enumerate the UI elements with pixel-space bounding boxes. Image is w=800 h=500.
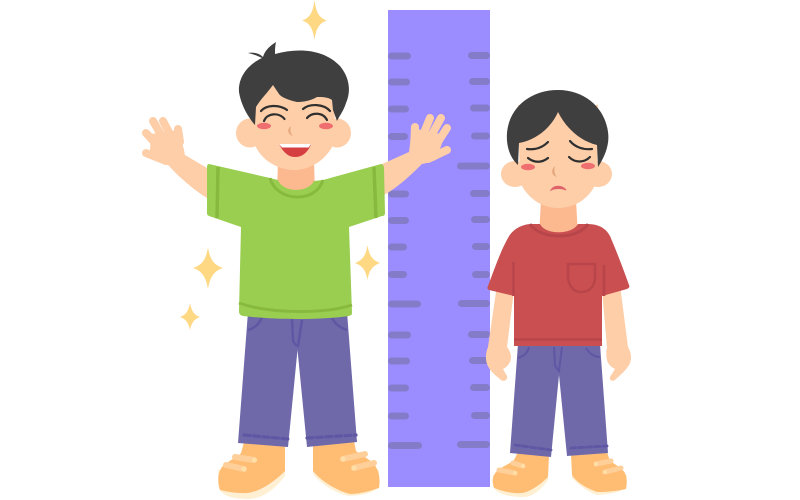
cheeks (257, 123, 271, 129)
ears (236, 118, 264, 148)
open mouth (279, 144, 311, 157)
green t-shirt (207, 164, 385, 319)
tall happy boy (146, 42, 447, 499)
hair (239, 42, 349, 125)
nose (552, 166, 557, 177)
nose (288, 126, 293, 136)
head (236, 42, 351, 170)
right arm and hand (380, 118, 447, 197)
trousers (238, 312, 357, 447)
sad mouth (551, 186, 566, 190)
hair (507, 90, 608, 167)
ears (501, 161, 529, 187)
shoes (218, 441, 380, 499)
head (501, 90, 612, 208)
neck (277, 160, 315, 194)
pocket (568, 264, 595, 292)
cheeks (521, 164, 535, 170)
shirt details (217, 167, 376, 312)
eyes and brows (527, 141, 592, 162)
left arm and hand (486, 285, 514, 381)
left arm and hand (146, 121, 207, 198)
icon: sparkle large left (193, 247, 223, 289)
face (254, 80, 335, 170)
red t-shirt (487, 224, 629, 346)
face (518, 105, 598, 208)
trousers (510, 344, 608, 457)
shoes (493, 452, 627, 497)
neck (539, 200, 578, 236)
ruler (388, 10, 490, 487)
shirt details (514, 224, 604, 340)
right arm and hand (602, 285, 631, 381)
icon: sparkle right (355, 245, 380, 280)
icon: sparkle small left (180, 303, 200, 330)
eyes and brows (261, 105, 330, 121)
icon: sparkle top (302, 0, 327, 40)
short sad boy (486, 90, 631, 497)
trouser details (515, 347, 607, 450)
trouser details (244, 317, 356, 439)
